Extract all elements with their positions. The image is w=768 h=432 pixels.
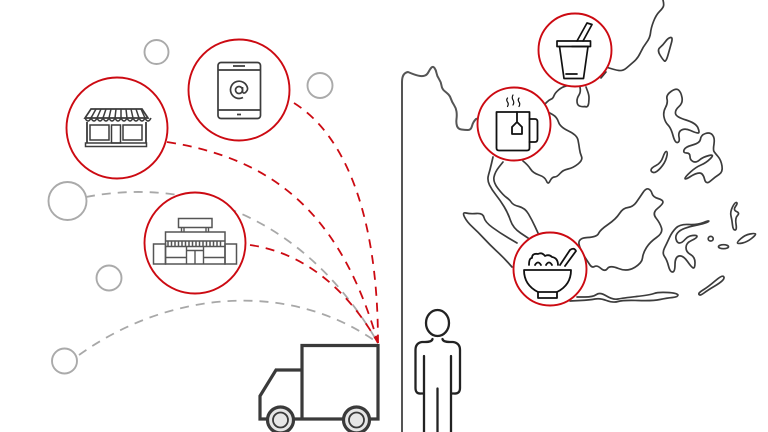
Malay peninsula xyxy=(488,157,528,238)
Sumatra xyxy=(464,213,517,267)
icon: plastic cup with straw xyxy=(538,14,612,86)
gray dashed routes xyxy=(79,192,378,355)
Vietnam coast xyxy=(523,112,582,183)
Taiwan xyxy=(658,37,672,61)
icon: mug with tea bag xyxy=(478,88,550,160)
icon: shopping mall xyxy=(144,192,246,294)
Visayas and Mindanao xyxy=(684,133,722,183)
mainland east coast xyxy=(545,0,664,104)
Java xyxy=(570,292,678,302)
divider and mainland west coast xyxy=(402,67,480,432)
icon: delivery truck xyxy=(260,346,378,432)
Borneo xyxy=(579,189,663,270)
icon: bowl with pestle xyxy=(514,232,586,306)
Sulawesi xyxy=(663,221,709,272)
wheels xyxy=(268,407,370,432)
Halmahera xyxy=(731,202,739,230)
Palawan xyxy=(651,151,667,173)
red dashed routes xyxy=(167,103,378,343)
Luzon xyxy=(664,89,699,143)
gray empty circles xyxy=(48,40,332,374)
Hainan xyxy=(577,87,589,107)
map: Southeast Asia xyxy=(402,0,756,432)
icon: tablet xyxy=(188,40,290,140)
icon: person xyxy=(416,310,460,432)
icon: shop xyxy=(66,78,168,178)
small eastern islands xyxy=(708,236,713,241)
